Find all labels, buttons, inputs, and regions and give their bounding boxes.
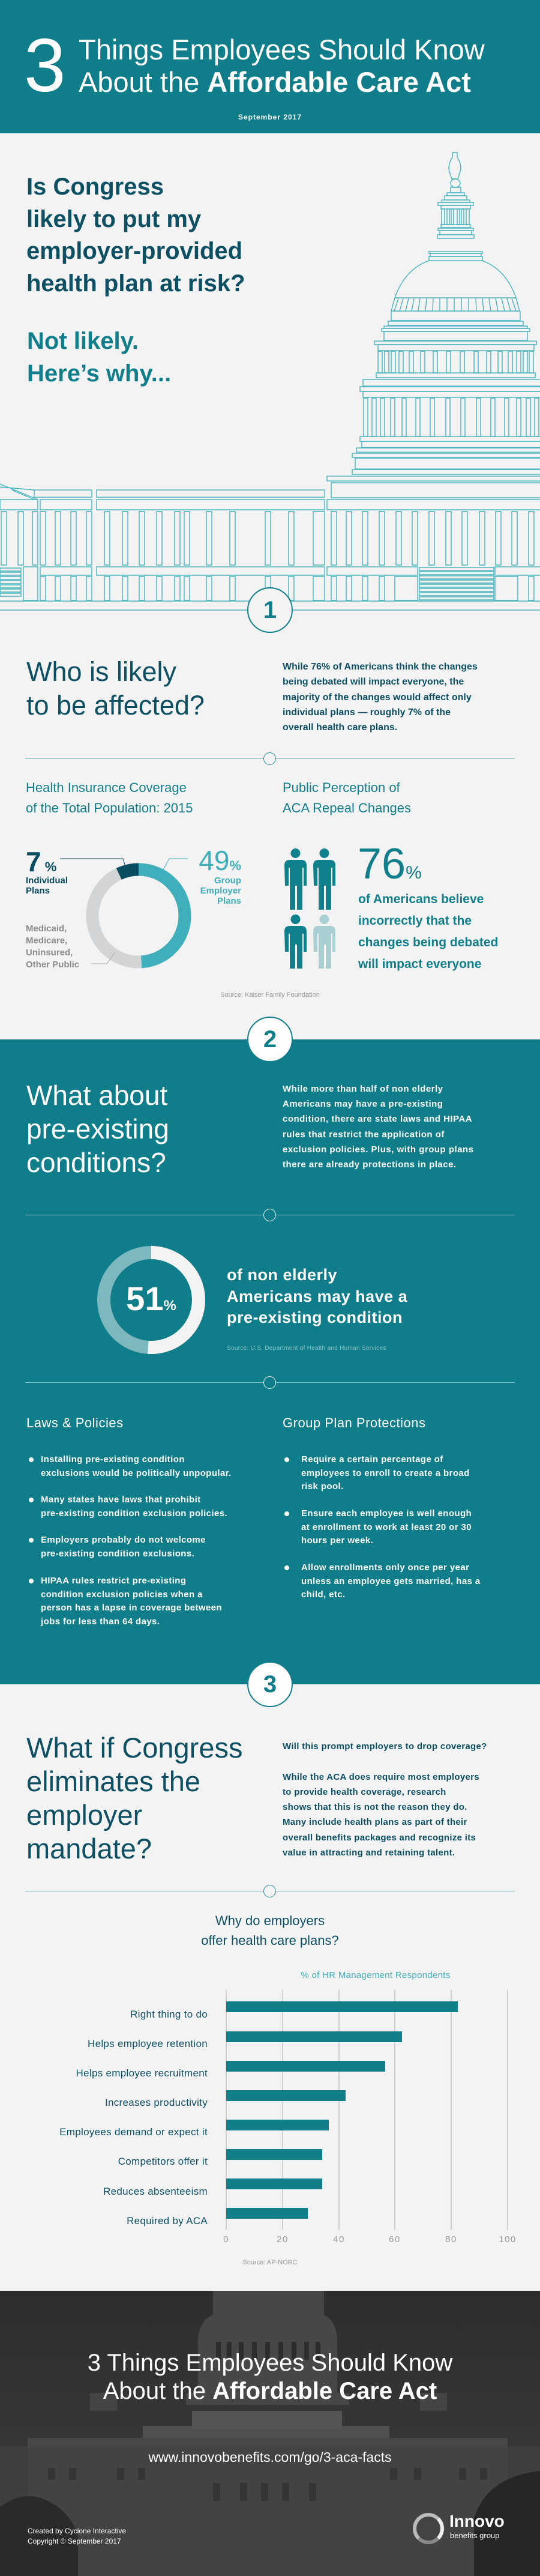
list: laws & policies: pre-existing condition exclusions.	[41, 1548, 194, 1559]
bar labels: Employees demand or expect it	[59, 2126, 208, 2138]
stat text: 51%: Americans may have a	[227, 1287, 407, 1305]
chart axis title: % of HR Management Respondents	[301, 1970, 451, 1980]
header numeral 3: 3	[24, 24, 66, 107]
section 3 intro text: Many include health plans as part of their	[283, 1817, 467, 1827]
section 2 heading: pre-existing	[26, 1113, 169, 1144]
label: 7% individual: Plans	[26, 886, 50, 896]
bar chart: 0	[223, 2234, 229, 2245]
section 1 heading: to be affected?	[26, 690, 205, 721]
chart title: perception: ACA Repeal Changes	[283, 800, 411, 815]
footer title: About the Affordable Care Act	[103, 2378, 437, 2404]
footer capitol photo silhouette	[0, 2291, 540, 2576]
footer credits	[28, 2527, 126, 2545]
intro answer: Not likely.	[27, 328, 139, 354]
bar labels	[59, 2009, 208, 2227]
section 2 intro text: exclusion policies. Plus, with group plans	[283, 1144, 474, 1155]
list: laws & policies: Laws & Policies	[26, 1415, 124, 1430]
intro question	[26, 174, 245, 297]
stat text: will impact everyone	[358, 957, 481, 971]
chart title: coverage: of the Total Population: 2015	[26, 800, 193, 815]
section 3 intro text: overall benefits packages and recognize its	[283, 1833, 476, 1843]
label: 49% group	[199, 845, 241, 906]
stat text: changes being debated	[358, 936, 498, 949]
header title	[79, 34, 485, 98]
section 3 heading: employer	[26, 1799, 142, 1831]
bar labels: Right thing to do	[130, 2009, 208, 2020]
label: 7% individual: 7 %	[26, 846, 56, 877]
donut: 51%: 51%	[126, 1280, 176, 1317]
list: group plan protections: hours per week.	[301, 1535, 373, 1546]
panel: section 2	[0, 1039, 540, 1684]
footer title: 3 Things Employees Should Know	[88, 2350, 452, 2376]
header band	[0, 0, 540, 133]
chart title: perception: Public Perception of	[283, 780, 400, 795]
bar labels: Required by ACA	[127, 2215, 208, 2227]
bar chart: 100	[499, 2234, 517, 2245]
chart title: why employers offer: Why do employers	[215, 1913, 325, 1928]
list: laws & policies: exclusions would be politically unpopular.	[41, 1468, 232, 1478]
footer url: www.innovobenefits.com/go/3-aca-facts	[148, 2449, 392, 2465]
label: 49% group: Plans	[217, 896, 241, 906]
label: other: Other Public	[26, 960, 79, 970]
chart title: why employers offer: offer health care plans?	[201, 1933, 339, 1948]
section 1 intro text: individual plans — roughly 7% of the	[283, 707, 451, 718]
list: laws & policies: condition exclusion policies when a	[41, 1589, 203, 1600]
section 2 heading: conditions?	[26, 1147, 166, 1178]
section 3 heading: eliminates the	[26, 1765, 200, 1797]
bar chart: 80	[445, 2234, 457, 2245]
list: laws & policies: jobs for less than 64 days.	[41, 1616, 160, 1626]
label: 49% group: 49%	[199, 845, 241, 876]
stat text: incorrectly that the	[358, 914, 472, 928]
bar chart: 60	[389, 2234, 401, 2245]
section 3 intro text: value in attracting and retaining talent.	[283, 1848, 455, 1858]
section 3 intro text	[283, 1741, 487, 1858]
bar labels: Competitors offer it	[118, 2156, 208, 2167]
label: other: Medicaid,	[26, 924, 67, 934]
panel: section 2: child, etc.	[301, 1589, 346, 1600]
header title: Things Employees Should Know	[79, 34, 485, 65]
label: 7% individual: Individual	[26, 875, 68, 886]
section 3 intro text: to provide health coverage, research	[283, 1787, 446, 1797]
intro question: employer-provided	[26, 238, 242, 264]
intro question: likely to put my	[26, 205, 201, 232]
section 1 heading	[26, 656, 205, 721]
list: laws & policies: Many states have laws that prohibit	[41, 1495, 201, 1505]
footer	[0, 2291, 540, 2576]
intro question: Is Congress	[26, 174, 164, 200]
logo: innovo	[413, 2512, 505, 2544]
chart title: why employers offer	[201, 1913, 339, 1948]
label: other	[26, 924, 79, 970]
bar labels: Helps employee retention	[88, 2038, 208, 2049]
section 1 intro text: being debated will impact everyone, the	[283, 677, 464, 687]
intro answer: Here’s why...	[27, 360, 171, 387]
bar labels: Reduces absenteeism	[103, 2186, 208, 2197]
list: group plan protections: Allow enrollments only once per year	[301, 1562, 469, 1573]
logo: innovo: Innovo	[449, 2512, 505, 2530]
section 2 intro text	[283, 1084, 474, 1170]
source 2: Source: U.S. Department of Health and Human Services	[227, 1345, 386, 1352]
section 2 intro text: While more than half of non elderly	[283, 1084, 443, 1094]
label: 49% group: Employer	[200, 886, 241, 896]
label: 49% group: Group	[214, 875, 241, 886]
source 1: Source: Kaiser Family Foundation	[220, 991, 320, 999]
section 3 heading	[26, 1732, 242, 1864]
bar labels: Increases productivity	[105, 2097, 208, 2108]
divider	[25, 758, 515, 759]
section 1 intro text	[283, 662, 478, 733]
label: 7% individual	[26, 846, 68, 896]
section 1 intro text: overall health care plans.	[283, 722, 397, 733]
chart title: coverage: Health Insurance Coverage	[26, 780, 187, 795]
section 2 intro text: condition, there are state laws and HIPAA	[283, 1114, 472, 1124]
list: laws & policies: HIPAA rules restrict pre-existing	[41, 1576, 186, 1586]
section number 1: 1	[263, 597, 277, 623]
list: group plan protections: employees to enroll to create a broad	[301, 1468, 470, 1478]
label: other: Medicare,	[26, 936, 67, 946]
list: group plan protections: at enrollment to work at least 20 or 30	[301, 1522, 472, 1532]
section number 3: 3	[263, 1671, 277, 1698]
list: laws & policies: pre-existing condition exclusion policies.	[41, 1508, 227, 1518]
stat: 76%: 76%	[358, 840, 422, 888]
section 3 heading: What if Congress	[26, 1732, 242, 1764]
list: laws & policies: person has a lapse in coverage between	[41, 1603, 222, 1613]
bar chart: 40	[333, 2234, 345, 2245]
list: laws & policies: Employers probably do not welcome	[41, 1535, 206, 1545]
list: group plan protections: risk pool.	[301, 1481, 344, 1492]
list: laws & policies: Installing pre-existing condition	[41, 1454, 185, 1465]
intro question: health plan at risk?	[26, 270, 245, 297]
list: group plan protections	[283, 1415, 481, 1600]
section number 2	[247, 1017, 293, 1062]
list: group plan protections: Group Plan Protections	[283, 1415, 425, 1430]
footer credits: Copyright © September 2017	[28, 2537, 121, 2545]
source 3: Source: AP-NORC	[242, 2259, 298, 2266]
section number 1	[247, 587, 293, 633]
bar chart: 20	[277, 2234, 289, 2245]
list: group plan protections: Require a certain percentage of	[301, 1454, 443, 1465]
section 2 heading: What about	[26, 1080, 167, 1111]
stat text: 51%	[227, 1266, 407, 1326]
section 1 intro text: While 76% of Americans think the changes	[283, 662, 478, 672]
section 2 heading	[26, 1080, 169, 1178]
section 1 heading: Who is likely	[26, 656, 176, 687]
section 3 intro text: While the ACA does require most employers	[283, 1772, 479, 1782]
people icons	[284, 848, 335, 969]
section 2 intro text: rules that restrict the application of	[283, 1129, 445, 1140]
section number 2: 2	[263, 1026, 277, 1053]
intro answer	[27, 328, 171, 387]
stat text	[358, 892, 498, 971]
chart title: coverage	[26, 780, 193, 815]
bar chart	[59, 1990, 517, 2245]
footer credits: Created by Cyclone Interactive	[28, 2527, 126, 2535]
capitol outline illustration	[0, 152, 540, 611]
stat text: 51%: pre-existing condition	[227, 1308, 403, 1326]
stat text: of Americans believe	[358, 892, 484, 906]
donut: 51%	[97, 1246, 205, 1354]
header title: About the Affordable Care Act	[79, 66, 471, 98]
list: group plan protections: Ensure each employee is well enough	[301, 1508, 472, 1519]
list: group plan protections: unless an employee gets married, has a	[301, 1576, 481, 1586]
stat text: 51%: of non elderly	[227, 1266, 337, 1284]
list: laws & policies	[26, 1415, 232, 1626]
section 3 intro text: Will this prompt employers to drop coverage?	[283, 1741, 487, 1752]
section number 3	[247, 1661, 293, 1707]
donut chart: coverage	[26, 845, 241, 970]
section 2 intro text: there are already protections in place.	[283, 1160, 457, 1170]
bar labels: Helps employee recruitment	[76, 2067, 208, 2079]
section 3 heading: mandate?	[26, 1833, 152, 1864]
logo: innovo: benefits group	[450, 2531, 499, 2540]
chart title: perception	[283, 780, 411, 815]
section 2 intro text: Americans may have a pre-existing	[283, 1099, 443, 1109]
section 3 intro text: shows that this is not the reason they do.	[283, 1802, 467, 1812]
section 1 intro text: majority of the changes would affect only	[283, 692, 472, 703]
footer title	[88, 2350, 452, 2404]
divider	[25, 1382, 515, 1383]
header date: September 2017	[238, 113, 302, 121]
label: other: Uninsured,	[26, 948, 73, 958]
